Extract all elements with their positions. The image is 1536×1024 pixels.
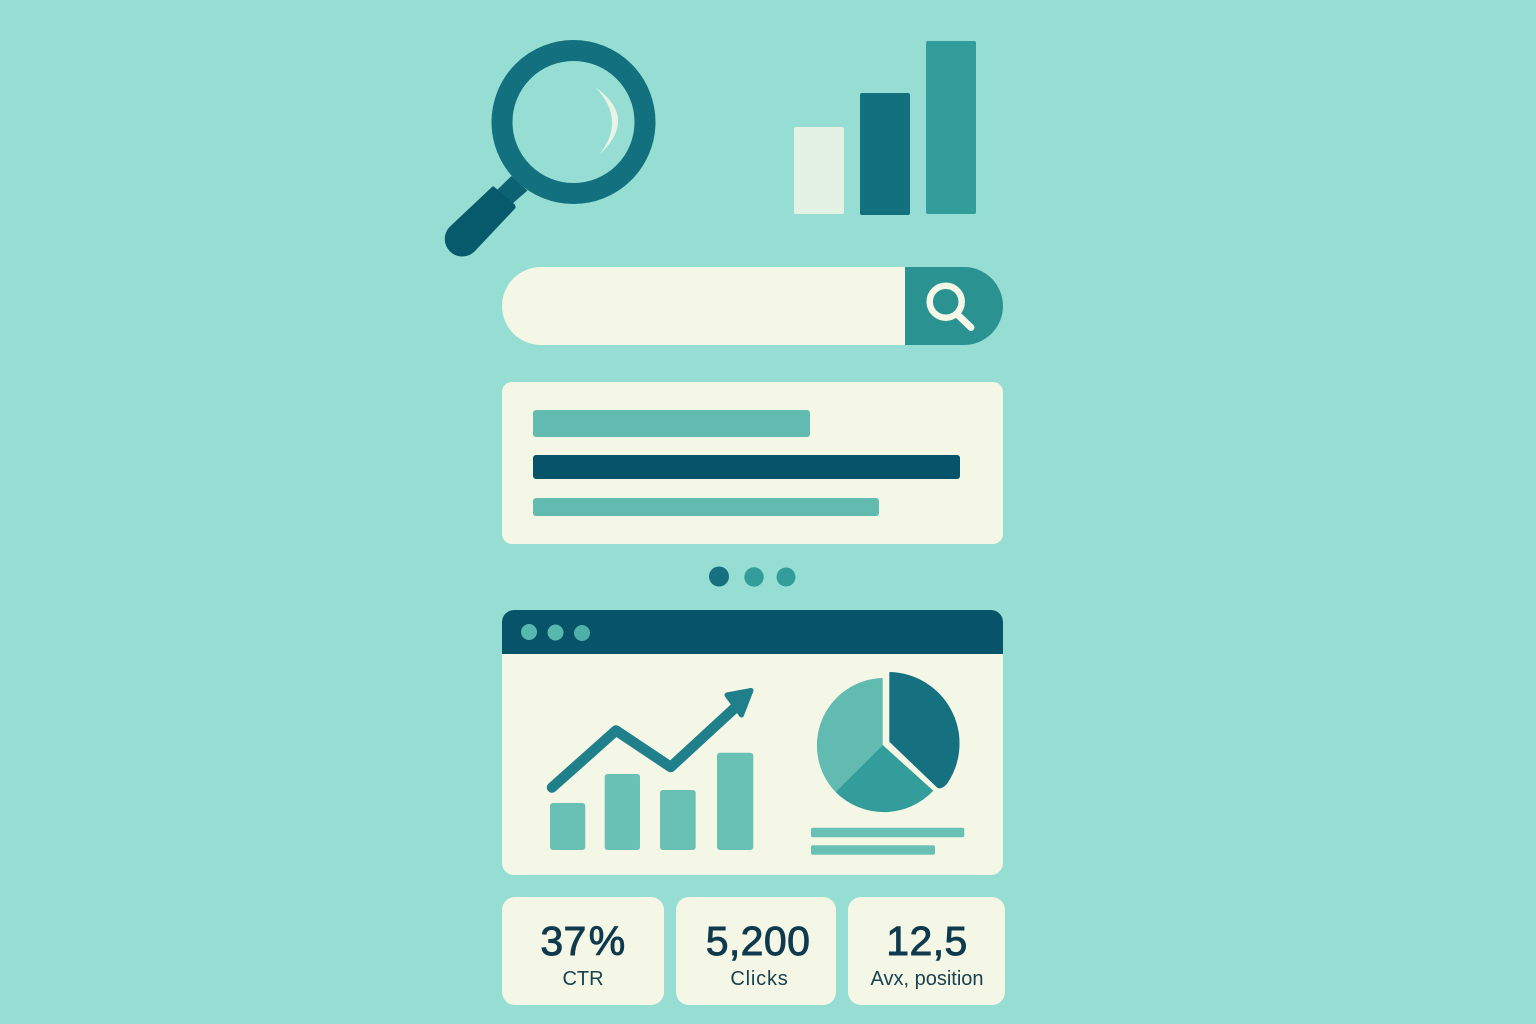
stat card: CTR bbox=[502, 897, 664, 1005]
stat card: CTR: 37% bbox=[540, 918, 626, 964]
panel: analytics browser window bbox=[502, 610, 1003, 875]
arrow: upward trend line bbox=[552, 690, 751, 788]
stat card: Clicks bbox=[676, 897, 836, 1005]
column chart bbox=[550, 753, 753, 850]
stat card: Clicks: 5,200 bbox=[706, 918, 810, 964]
stat card: CTR: CTR bbox=[562, 968, 604, 990]
panel: search result card bbox=[502, 382, 1003, 544]
legend lines bbox=[811, 828, 964, 855]
bar chart icon bbox=[794, 41, 976, 215]
stat card: Avx, position: Avx, position bbox=[870, 968, 984, 990]
pie chart bbox=[817, 672, 959, 812]
pagination dots bbox=[709, 566, 796, 587]
stat card: Avx, position bbox=[848, 897, 1005, 1005]
search bar bbox=[502, 267, 1003, 345]
icon: magnifying glass bbox=[445, 50, 645, 257]
stat card: Avx, position: 12,5 bbox=[886, 918, 968, 964]
stat card: Clicks: Clicks bbox=[730, 968, 789, 990]
